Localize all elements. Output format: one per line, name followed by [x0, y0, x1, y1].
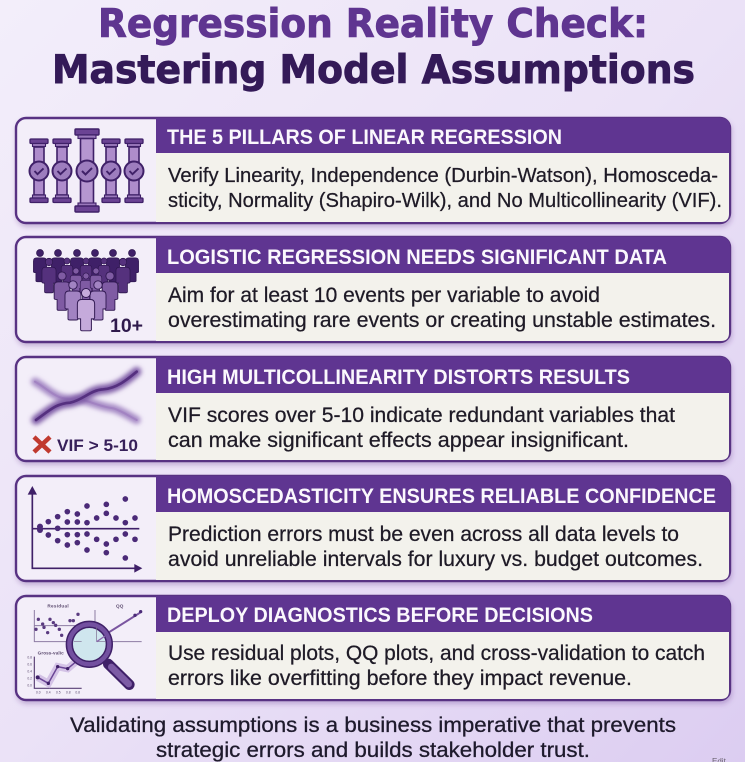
- heading: LOGISTIC REGRESSION NEEDS SIGNIFICANT DATA: [167, 246, 667, 269]
- body text: VIF scores over 5-10 indicate redundant variables that: [168, 404, 675, 427]
- card: [16, 357, 730, 461]
- residual plot: Residual: [47, 603, 69, 608]
- cross-validation plot: 0.5: [56, 690, 61, 694]
- panel: the 5 pillars: [16, 118, 730, 223]
- QQ plot: QQ: [116, 603, 124, 608]
- text background: [156, 632, 729, 699]
- icon: red cross: [34, 437, 50, 452]
- body text: Prediction errors must be even across all data levels to: [168, 523, 679, 546]
- panel: diagnostics: [16, 596, 730, 700]
- header bar: [156, 118, 730, 153]
- heading: HIGH MULTICOLLINEARITY DISTORTS RESULTS: [167, 366, 630, 389]
- label: 10+: 10+: [110, 316, 143, 337]
- text background: [156, 512, 729, 580]
- header bar: [156, 357, 730, 393]
- cross-validation plot: 0.8: [75, 690, 80, 694]
- body text: Verify Linearity, Independence (Durbin-Watson), Homosceda-: [168, 164, 718, 187]
- title: Regression Reality Check:: [98, 1, 648, 47]
- header bar: [156, 476, 730, 512]
- body text: can make significant effects appear insignificant.: [168, 429, 629, 452]
- text background: [156, 152, 729, 222]
- title: [52, 1, 695, 93]
- cross-validation plot: 0.4: [46, 690, 51, 694]
- body text: [168, 284, 716, 332]
- panel: logistic regression: [16, 237, 730, 342]
- icon: overlapping blurred lines: [35, 372, 137, 420]
- panel: homoscedasticity: [16, 476, 730, 581]
- closing statement: strategic errors and builds stakeholder trust.: [156, 738, 590, 762]
- cross-validation plot: Gross-valic: [38, 651, 64, 656]
- icon: five pillars with check marks: [30, 129, 144, 212]
- text background: [156, 273, 729, 341]
- closing statement: Validating assumptions is a business imperative that prevents: [70, 713, 676, 737]
- closing statement: [70, 713, 676, 762]
- heading: THE 5 PILLARS OF LINEAR REGRESSION: [167, 126, 562, 149]
- body text: [168, 404, 675, 452]
- text background: [156, 393, 729, 460]
- body text: errors like overfitting before they impact revenue.: [168, 667, 632, 690]
- cross-validation plot: [27, 651, 82, 694]
- cross-validation plot: 0.6: [27, 662, 32, 666]
- card: [16, 118, 730, 223]
- cross-validation plot: 0.4: [27, 670, 32, 674]
- heading: DEPLOY DIAGNOSTICS BEFORE DECISIONS: [167, 604, 593, 627]
- panel: multicollinearity: [16, 357, 730, 461]
- body text: [168, 164, 722, 212]
- card: [16, 596, 730, 700]
- body text: overestimating rare events or creating unstable estimates.: [168, 309, 716, 332]
- label: VIF threshold: VIF > 5-10: [57, 436, 138, 455]
- header bar: [156, 237, 730, 273]
- body text: Aim for at least 10 events per variable to avoid: [168, 284, 600, 307]
- cross-validation plot: 0.8: [66, 690, 71, 694]
- magnifier: [69, 624, 129, 685]
- icon: residual scatter plot: [28, 486, 142, 573]
- body text: sticity, Normality (Shapiro-Wilk), and No Multicollinearity (VIF).: [168, 189, 722, 212]
- cross-validation plot: 0.0: [27, 684, 32, 688]
- body text: [168, 523, 703, 571]
- icon: diagnostic plots under magnifier: [27, 603, 142, 694]
- cross-validation plot: 0.2: [27, 676, 32, 680]
- title: Mastering Model Assumptions: [52, 47, 695, 93]
- card: [16, 476, 730, 581]
- cross-validation plot: 0.0: [36, 690, 41, 694]
- card: [16, 237, 730, 342]
- icon: crowd of people with 10+: [33, 250, 139, 331]
- cross-validation plot: 0.8: [27, 655, 32, 659]
- body text: avoid unreliable intervals for luxury vs. budget outcomes.: [168, 548, 703, 571]
- heading: HOMOSCEDASTICITY ENSURES RELIABLE CONFIDENCE: [167, 485, 716, 508]
- body text: [168, 642, 705, 690]
- body text: Use residual plots, QQ plots, and cross-validation to catch: [168, 642, 705, 665]
- header bar: [156, 596, 730, 632]
